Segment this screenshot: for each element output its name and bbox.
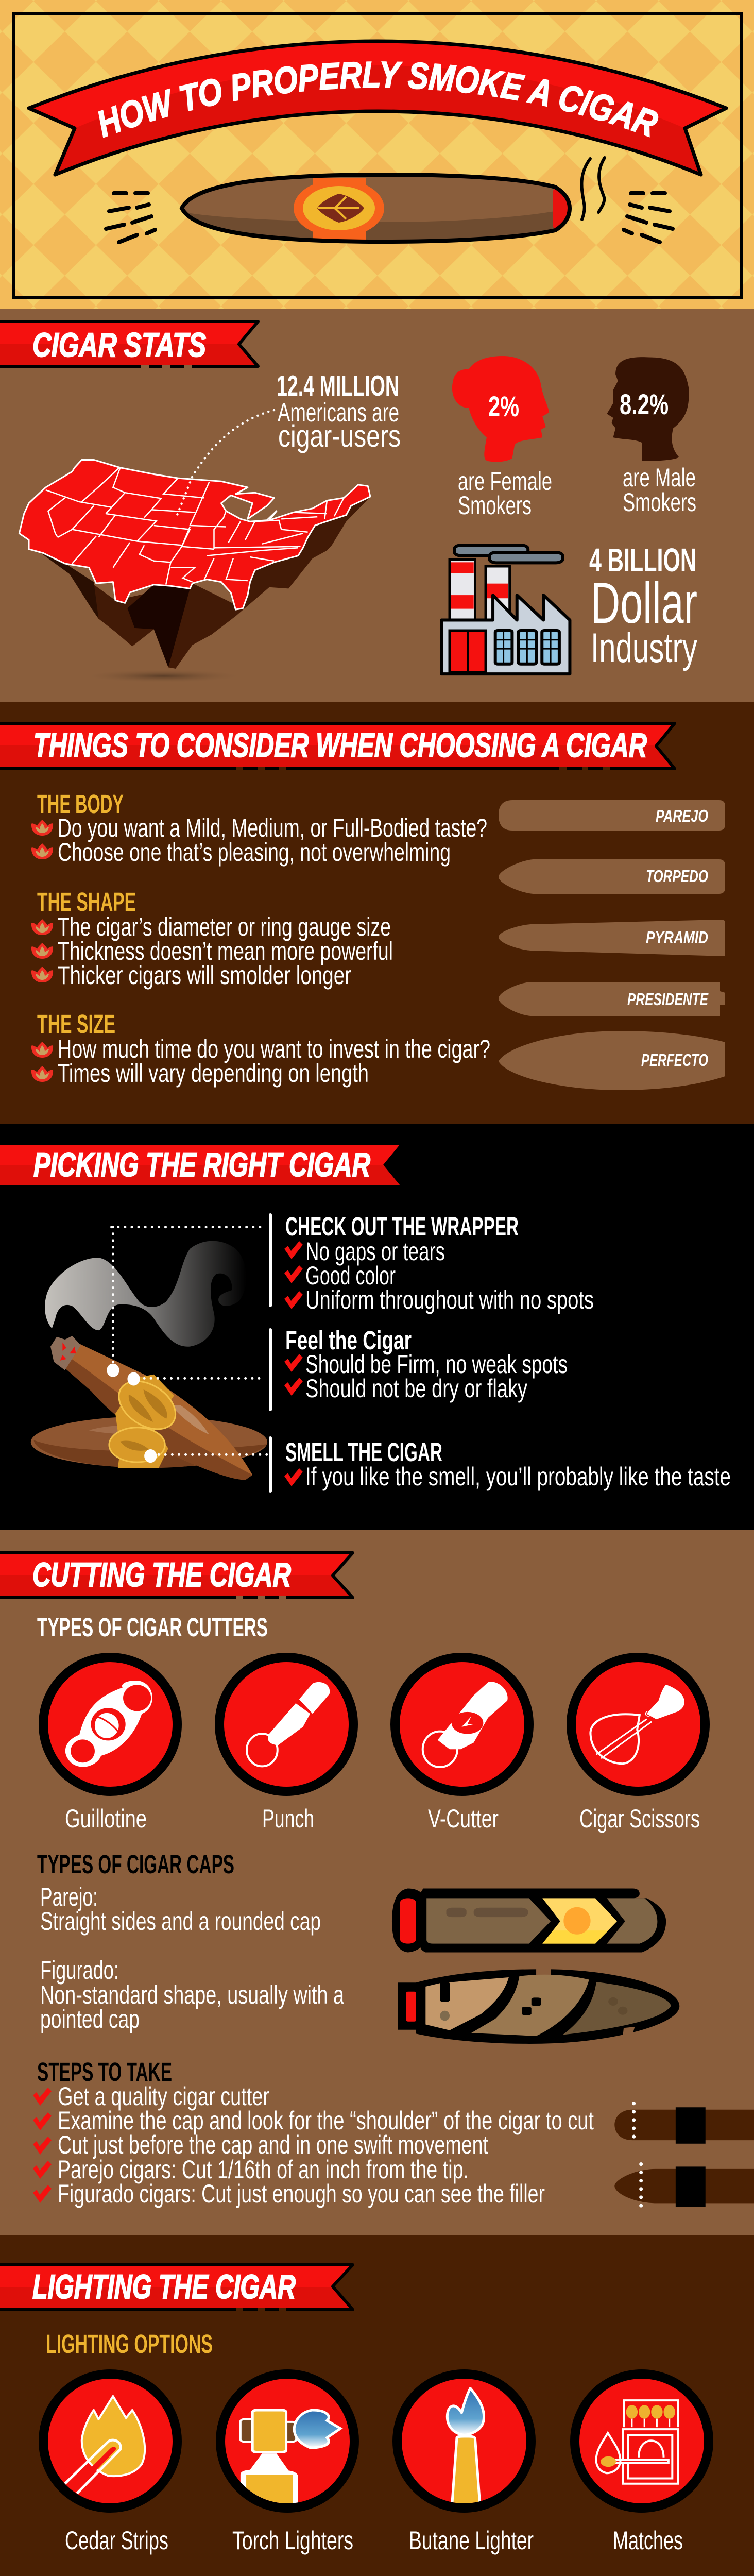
text block: check out the wrapper: No gaps or tears <box>305 1237 445 1266</box>
illustration: smoking cigar with smoke <box>31 1227 267 1480</box>
icon: cigar smoke wisps <box>581 158 605 219</box>
text block: the body <box>31 789 487 867</box>
cigar shape: pyramid: PYRAMID <box>646 928 708 947</box>
text: parejo cap <box>40 1883 321 1936</box>
text block: smell the cigar <box>284 1437 731 1491</box>
callout: 12.4 million americans: 12.4 MILLION <box>277 369 399 402</box>
text: are female smokers: Smokers <box>458 491 532 520</box>
cigar shape: torpedo <box>499 859 725 894</box>
callout: 4 billion dollar industry: Industry <box>591 625 697 671</box>
text block: the size: THE SIZE <box>37 1009 115 1039</box>
header frame <box>14 13 741 298</box>
callout: 4 billion dollar industry: 4 BILLION <box>589 541 696 579</box>
map: floating usa <box>19 460 370 683</box>
heading: types of cigar cutters: TYPES OF CIGAR CUTTERS <box>37 1613 268 1642</box>
label: matches: Matches <box>613 2526 683 2555</box>
panel: things to consider <box>0 702 754 1124</box>
title ribbon <box>27 39 728 176</box>
text block: the shape: THE SHAPE <box>37 887 136 917</box>
header patterned background <box>0 0 754 309</box>
icon: torch lighter <box>220 2374 354 2555</box>
icon: figurado cigar <box>398 1968 679 2044</box>
icon: female head 2% <box>452 356 549 462</box>
text block: feel the cigar <box>284 1326 568 1403</box>
text: are female smokers: are Female <box>458 467 552 496</box>
heading ribbon: cutting: CUTTING THE CIGAR <box>32 1555 291 1594</box>
text: are male smokers: are Male <box>623 463 696 492</box>
cigar shape: presidente <box>499 982 725 1016</box>
label: torch lighters: Torch Lighters <box>232 2526 353 2555</box>
label: punch: Punch <box>262 1804 314 1833</box>
heading: lighting options: LIGHTING OPTIONS <box>46 2329 213 2359</box>
text block: the body: Choose one that’s pleasing, not overwhelming <box>58 838 451 867</box>
icon: punch <box>219 1657 353 1833</box>
text block: the size: Times will vary depending on length <box>58 1059 369 1088</box>
dotted connector: map to callout <box>176 410 274 519</box>
callout: 12.4 million americans <box>277 369 401 453</box>
icon: male head 8.2% <box>607 357 689 461</box>
text block: steps to take: Examine the cap and look for the “shoulder” of the cigar to cut <box>58 2106 594 2135</box>
text block: the body: Do you want a Mild, Medium, or Full-Bodied taste? <box>58 814 487 842</box>
text block: steps to take: Figurado cigars: Cut just enough so you can see the filler <box>58 2179 545 2208</box>
text block: the shape: Thicker cigars will smolder longer <box>58 961 351 990</box>
text block: smell the cigar: SMELL THE CIGAR <box>285 1437 442 1467</box>
heading ribbon: lighting <box>0 2265 353 2311</box>
icon: parejo cut diagram <box>614 2104 754 2145</box>
icon: figurado cut diagram <box>614 2164 754 2207</box>
text block: the shape <box>31 887 393 990</box>
text block: steps to take: Parejo cigars: Cut 1/16th of an inch from the tip. <box>58 2155 469 2184</box>
text block: the body: THE BODY <box>37 789 124 819</box>
label: cigar scissors: Cigar Scissors <box>579 1804 700 1833</box>
callout: 12.4 million americans: Americans are <box>278 398 399 428</box>
callout: 4 billion dollar industry: Dollar <box>591 571 697 635</box>
icon: burning cigar <box>182 175 570 242</box>
callout: 12.4 million americans: cigar-users <box>278 419 401 453</box>
chart: cigar shape silhouettes <box>499 800 725 1090</box>
cigar shape: pyramid <box>499 920 725 956</box>
panel: lighting the cigar <box>0 2235 754 2576</box>
panel: title header <box>0 0 754 309</box>
text block: steps to take: Cut just before the cap and in one swift movement <box>58 2130 488 2159</box>
icon: v-cutter <box>395 1657 529 1833</box>
text block: feel the cigar: Feel the Cigar <box>285 1326 412 1355</box>
text block: check out the wrapper: CHECK OUT THE WRAPPER <box>285 1212 519 1241</box>
text block: steps to take <box>33 2057 594 2208</box>
panel: cutting the cigar <box>0 1530 754 2235</box>
icon: left motion dashes <box>106 193 155 242</box>
icon: butane lighter <box>397 2374 534 2555</box>
heading ribbon: cigar stats: CIGAR STATS <box>32 326 206 364</box>
text block: feel the cigar: Should be Firm, no weak spots <box>305 1350 568 1379</box>
text: are female smokers <box>458 467 552 520</box>
heading ribbon: picking: PICKING THE RIGHT CIGAR <box>33 1145 370 1183</box>
cigar shape: presidente: PRESIDENTE <box>627 990 709 1009</box>
icon: factory <box>441 545 570 674</box>
text block: check out the wrapper: Good color <box>305 1261 396 1290</box>
heading ribbon: lighting: LIGHTING THE CIGAR <box>32 2267 296 2306</box>
icon: right motion dashes <box>624 193 673 242</box>
icon: cedar strips <box>43 2374 177 2555</box>
text block: check out the wrapper: Uniform throughout with no spots <box>305 1285 594 1314</box>
text block: the shape: Thickness doesn’t mean more powerful <box>58 937 393 965</box>
callout: 4 billion dollar industry <box>589 541 697 671</box>
icon: matches <box>575 2374 709 2555</box>
cigar shape: parejo <box>499 800 725 831</box>
text: parejo cap: Parejo: <box>40 1883 98 1911</box>
cigar shape: torpedo: TORPEDO <box>646 867 708 886</box>
text: are male smokers: Smokers <box>623 488 696 517</box>
text: figurado cap: pointed cap <box>40 2005 140 2033</box>
text: figurado cap <box>40 1956 344 2033</box>
text block: the size <box>31 1009 490 1088</box>
cigar shape: parejo: PAREJO <box>656 806 708 825</box>
text block: the size: How much time do you want to invest in the cigar? <box>58 1035 490 1063</box>
label: v-cutter: V-Cutter <box>428 1804 499 1833</box>
icon: cigar scissors <box>571 1657 705 1833</box>
text: are male smokers <box>623 463 696 517</box>
label: guillotine: Guillotine <box>65 1804 147 1833</box>
heading: types of cigar caps: TYPES OF CIGAR CAPS <box>37 1850 234 1879</box>
cigar shape: perfecto: PERFECTO <box>641 1050 708 1070</box>
text block: feel the cigar: Should not be dry or flaky <box>305 1374 527 1403</box>
text block: check out the wrapper <box>284 1212 594 1314</box>
icon: guillotine <box>43 1657 177 1833</box>
text block: steps to take: STEPS TO TAKE <box>37 2057 172 2087</box>
divider bars <box>269 1213 272 1493</box>
label: cedar strips: Cedar Strips <box>65 2526 168 2555</box>
panel: picking the right cigar <box>0 1124 754 1530</box>
cutting background <box>0 1530 754 2235</box>
lighting background <box>0 2235 754 2576</box>
text: figurado cap: Figurado: <box>40 1956 119 1985</box>
label: butane lighter: Butane Lighter <box>409 2526 534 2555</box>
text block: steps to take: Get a quality cigar cutter <box>58 2082 269 2111</box>
text block: the shape: The cigar’s diameter or ring gauge size <box>58 912 391 941</box>
text: parejo cap: Straight sides and a rounded cap <box>40 1907 321 1936</box>
title text: HOW TO PROPERLY SMOKE A CIGAR <box>98 61 658 138</box>
icon: male head 8.2%: 8.2% <box>620 388 669 420</box>
text: figurado cap: Non-standard shape, usually with a <box>40 1980 344 2009</box>
cigar shape: perfecto <box>499 1031 725 1090</box>
consider background <box>0 702 754 1124</box>
icon: female head 2%: 2% <box>488 390 519 422</box>
panel: cigar stats <box>0 309 754 702</box>
icon: parejo cigar <box>392 1889 666 1952</box>
stats background <box>0 309 754 702</box>
picking background <box>0 1124 754 1530</box>
